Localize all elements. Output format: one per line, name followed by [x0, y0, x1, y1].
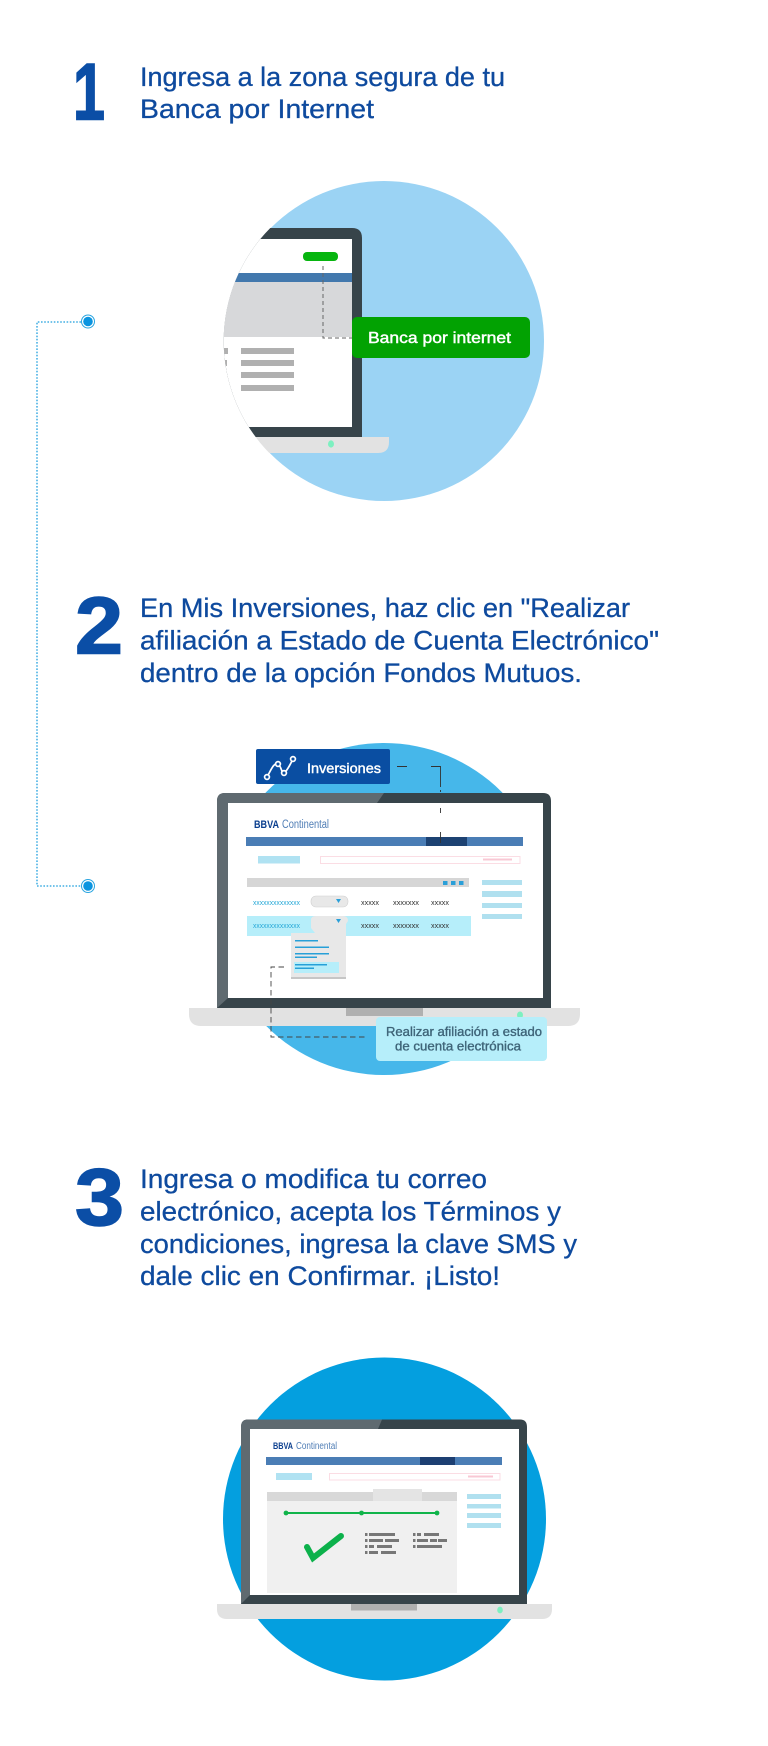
button: Banca por internet: Banca por internet	[368, 330, 512, 347]
BBVA logo	[254, 819, 329, 831]
dashed leader	[323, 266, 352, 338]
step 1 heading	[140, 62, 505, 124]
step 1 heading: Banca por Internet	[140, 94, 375, 124]
table row 1: xxxxx	[361, 900, 380, 907]
table row 1: xxxxxxxxxxxxxx	[253, 900, 300, 907]
icon: trend line	[265, 757, 295, 779]
power light	[328, 440, 334, 448]
progress line	[284, 1511, 439, 1515]
illustration: step 3 laptop	[217, 1358, 552, 1680]
step 3 heading: Ingresa o modifica tu correo	[140, 1164, 487, 1194]
dropdown menu	[291, 916, 348, 979]
laptop bezel	[241, 1420, 527, 1604]
navigation bar	[266, 1457, 502, 1465]
table row 1: xxxxxxx	[393, 900, 420, 907]
side menu lines	[467, 1494, 501, 1528]
table row 1	[253, 896, 450, 907]
navigation bar	[246, 837, 523, 846]
dotted connector between steps 1 and 2	[37, 315, 94, 892]
illustration: step 2 laptop	[189, 743, 580, 1075]
label: Inversiones	[256, 749, 390, 784]
callout: Realizar afiliación: de cuenta electrónica	[395, 1040, 521, 1054]
step 2 number: 2	[75, 582, 123, 672]
step 2 heading: En Mis Inversiones, haz clic en "Realizar	[140, 593, 630, 623]
table row 2 highlighted: xxxxxxxxxxxxxx	[253, 923, 300, 930]
step 3 number: 3	[75, 1153, 124, 1243]
table row 1: xxxxx	[431, 900, 450, 907]
table row 2 highlighted: xxxxx	[431, 923, 450, 930]
step 2 heading: afiliación a Estado de Cuenta Electrónico"	[140, 626, 659, 656]
step 2 heading: dentro de la opción Fondos Mutuos.	[140, 658, 582, 688]
step 3 heading: condiciones, ingresa la clave SMS y	[140, 1229, 577, 1259]
label: Inversiones: Inversiones	[307, 760, 381, 776]
step 1 number: 1	[73, 48, 105, 138]
step 3 heading: electrónico, acepta los Términos y	[140, 1196, 562, 1226]
step 1 heading: Ingresa a la zona segura de tu	[140, 62, 505, 92]
button: Banca por internet	[352, 317, 530, 358]
confirmation panel	[267, 1489, 457, 1593]
table row 2 highlighted: xxxxx	[361, 923, 380, 930]
step 2 heading	[140, 593, 659, 688]
callout: Realizar afiliación	[376, 1017, 547, 1061]
dashed leader to callout	[271, 967, 368, 1037]
table header	[247, 878, 469, 887]
BBVA logo: Continental	[296, 1441, 337, 1452]
side menu lines	[482, 880, 522, 919]
green menu pill	[303, 252, 338, 261]
step 3 heading	[140, 1164, 577, 1291]
illustration: step 1 laptop close-up	[200, 181, 544, 501]
BBVA logo: Continental	[282, 819, 329, 831]
BBVA logo: BBVA	[254, 819, 279, 831]
BBVA logo	[273, 1441, 337, 1452]
icon: check mark	[307, 1536, 341, 1558]
details list	[365, 1533, 447, 1554]
BBVA logo: BBVA	[273, 1441, 293, 1452]
dashed leader from Inversiones	[397, 766, 440, 843]
laptop bezel	[217, 793, 551, 1008]
search row	[276, 1473, 500, 1480]
laptop base	[217, 1604, 552, 1619]
table row 2 highlighted: xxxxxxx	[393, 923, 420, 930]
laptop base	[189, 1008, 580, 1026]
table row 2 highlighted	[247, 916, 471, 936]
search row	[258, 856, 520, 864]
step 3 heading: dale clic en Confirmar. ¡Listo!	[140, 1261, 500, 1291]
callout: Realizar afiliación: Realizar afiliación a estado	[386, 1025, 542, 1039]
